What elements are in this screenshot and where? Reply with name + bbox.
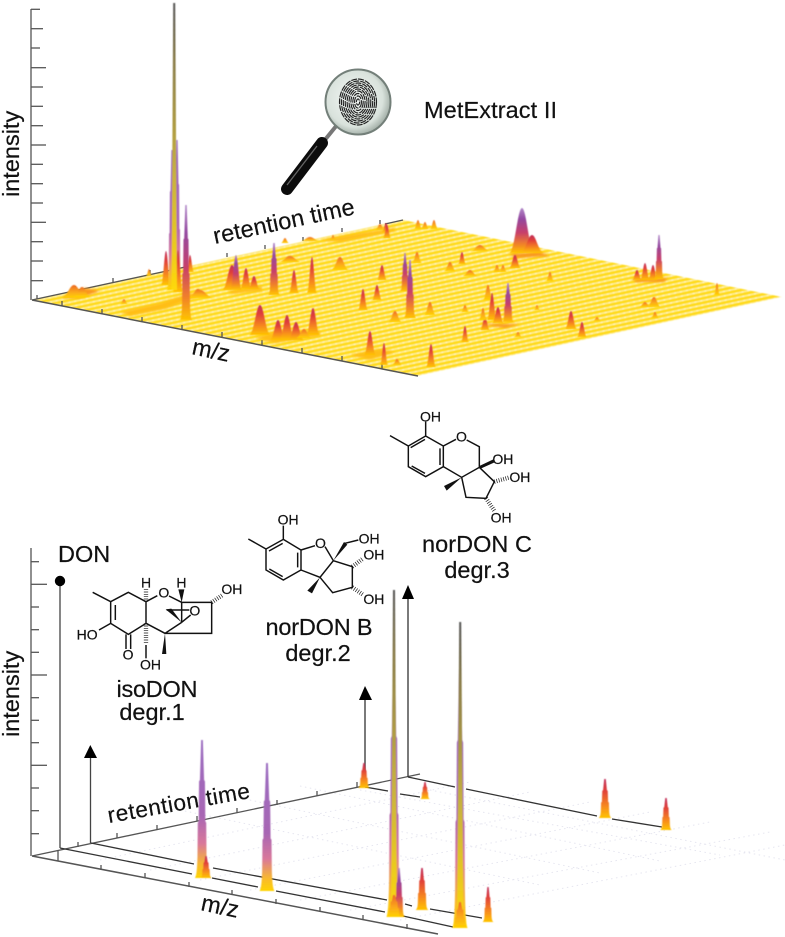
bottom plot: tall peak isoDON A: [195, 740, 212, 878]
label: isoDON degr.1: degr.1: [119, 699, 185, 725]
label: isoDON degr.1: isoDON: [116, 676, 198, 702]
molecule: isoDON: O: [158, 584, 169, 600]
molecule: isoDON: H: [141, 574, 151, 590]
top plot: orange ridges under the peaks: [62, 228, 668, 360]
bottom plot: compound trace lines along m/z: [60, 777, 662, 927]
magnifier lens: [326, 70, 390, 134]
top plot: small and medium peaks on the plane: [61, 220, 720, 367]
retention time label, bottom plot: retention time: [106, 778, 252, 828]
molecule: norDON B: OH: [363, 591, 384, 607]
arrow: norDON B rising: [359, 686, 372, 787]
molecule: norDON C: O: [456, 428, 467, 444]
label: norDON B degr.2: norDON B: [266, 614, 372, 640]
label: norDON B degr.2: [266, 614, 372, 666]
magnifier handle: [287, 125, 337, 189]
molecule: isoDON: [77, 574, 242, 672]
bottom plot: y axis intensity: [31, 548, 47, 856]
m/z label, bottom plot: m/z: [199, 889, 241, 923]
molecule: norDON B: [248, 512, 384, 607]
bottom plot: tall peak isoDON B: [260, 763, 274, 891]
molecule: isoDON: H: [176, 574, 186, 590]
molecule: isoDON: O: [123, 646, 134, 662]
label: norDON B degr.2: degr.2: [285, 640, 351, 666]
label: norDON C degr.3: norDON C: [422, 531, 532, 557]
molecule: norDON B: OH: [278, 512, 299, 528]
DON label: DON: [58, 541, 110, 567]
molecule: isoDON: OH: [140, 656, 161, 672]
bottom plot: axes: [32, 774, 438, 934]
magnifying glass icon: [287, 70, 390, 189]
top plot: m/z label: m/z: [190, 333, 232, 367]
top plot: yellow retention time by m/z plane: [32, 220, 782, 376]
bottom plot: tall peak norDON C: [452, 622, 468, 928]
top plot: axis lines on the plane: [32, 220, 418, 376]
MetExtract II label: MetExtract II: [424, 97, 557, 123]
molecule: isoDON: HO: [77, 626, 98, 642]
arrow: norDON C rising: [402, 585, 414, 777]
label: isoDON degr.1: [116, 676, 198, 725]
label: norDON C degr.3: [422, 531, 532, 583]
top plot: tall purple peaks: [167, 3, 664, 322]
bottom plot: tall peak norDON B: [386, 590, 405, 917]
fingerprint: [340, 79, 376, 125]
DON stem with dot: [55, 576, 65, 848]
arrow: isoDON rising: [84, 745, 97, 843]
label: norDON C degr.3: degr.3: [444, 557, 510, 583]
molecule: norDON B: OH: [363, 547, 384, 563]
molecule: norDON C: [390, 408, 530, 525]
molecule: norDON C: OH: [491, 509, 512, 525]
bottom plot: faint dotted plane grid: [100, 782, 785, 920]
bottom plot: small peaks: [358, 763, 672, 922]
molecule: norDON C: OH: [420, 408, 441, 424]
top plot: retention time label: retention time: [211, 194, 357, 249]
molecule: norDON B: O: [315, 535, 326, 551]
molecule: isoDON: OH: [221, 581, 242, 597]
molecule: norDON C: OH: [509, 469, 530, 485]
molecule: isoDON: O: [189, 602, 200, 618]
molecule: norDON C: OH: [492, 451, 513, 467]
top plot: y axis intensity: [31, 9, 46, 300]
molecule: norDON B: OH: [359, 530, 380, 546]
